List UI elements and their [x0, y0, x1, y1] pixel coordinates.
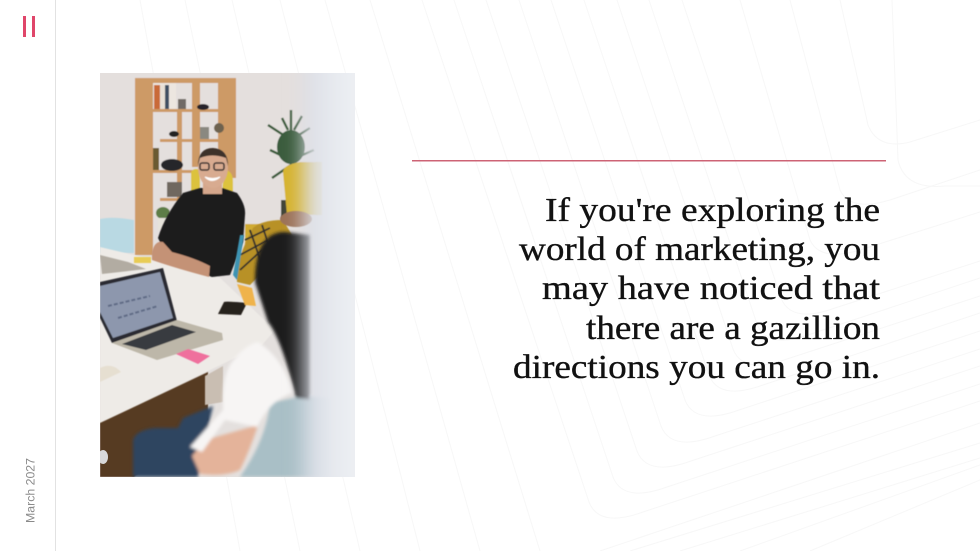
main statement text: If you're exploring the: [545, 192, 880, 229]
yellow armchair: [283, 162, 322, 215]
left sidebar divider: [55, 0, 56, 551]
man: [152, 148, 245, 277]
person with plaid shirt: [233, 211, 312, 285]
foreground blurred veil: [289, 73, 355, 477]
main statement text: directions you can go in.: [513, 349, 880, 386]
bookshelf: [135, 78, 236, 255]
main statement text: there are a gazillion: [586, 310, 880, 347]
main statement text: may have noticed that: [542, 270, 881, 307]
main statement text: world of marketing, you: [519, 231, 880, 268]
plant: [268, 110, 314, 178]
photo: team meeting around a table: [100, 73, 355, 477]
woman seen from behind: [133, 232, 330, 477]
blue chair: [100, 218, 134, 253]
icon: pause-style logo mark: [23, 16, 35, 37]
wall: [134, 78, 312, 253]
accent rule: [412, 160, 886, 162]
main statement text: [513, 192, 881, 386]
laptops, phone, notes: [100, 255, 256, 382]
date label: March 2027: [26, 458, 38, 523]
table: [100, 247, 275, 423]
